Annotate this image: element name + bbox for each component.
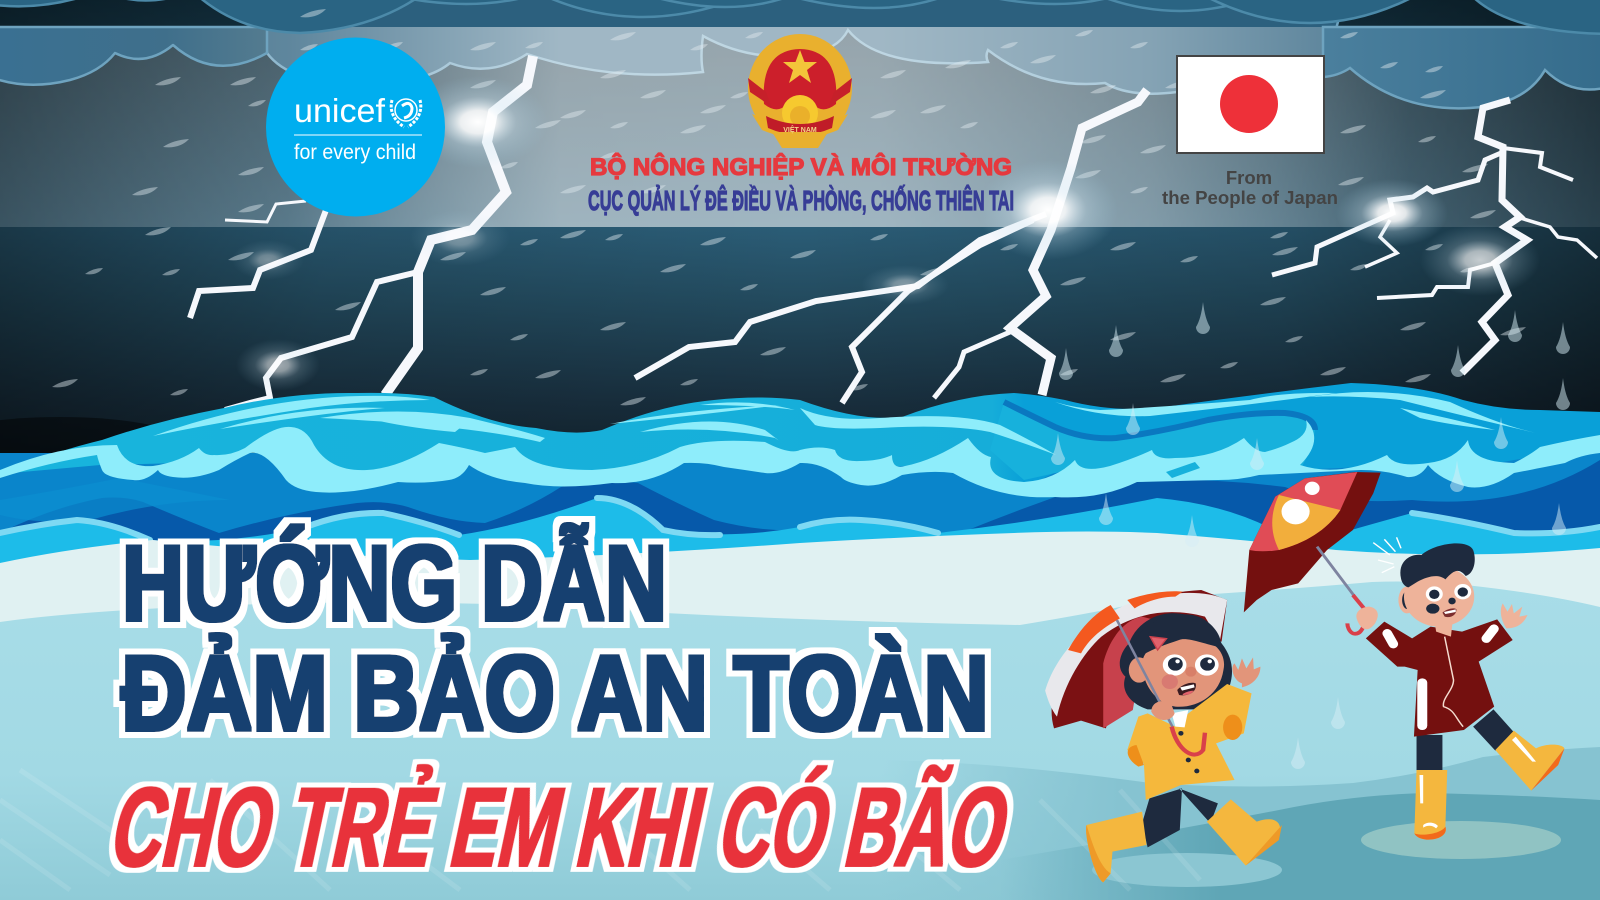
ministry name: BỘ NÔNG NGHIỆP VÀ MÔI TRƯỜNG <box>590 153 1012 181</box>
ministry name: CỤC QUẢN LÝ ĐÊ ĐIỀU VÀ PHÒNG, CHỐNG THIÊN TAI <box>588 184 1014 216</box>
wave curl <box>990 402 1315 480</box>
lightning glows <box>232 76 1540 391</box>
Japan caption <box>1162 167 1338 208</box>
Japan caption: the People of Japan <box>1162 187 1338 208</box>
lightning bolt: left <box>190 56 533 410</box>
storm cloud, upper left <box>0 27 267 85</box>
pale shoreline <box>0 532 1600 640</box>
icon: flag of Japan <box>1177 56 1324 153</box>
main wave body <box>0 383 1600 488</box>
logo: unicef <box>266 38 445 216</box>
Japan caption: From <box>1226 167 1272 188</box>
lightning bolts <box>190 56 1597 410</box>
bright lower wave <box>0 498 1600 580</box>
flood wave <box>0 383 1600 580</box>
storm clouds, top row <box>0 0 1600 34</box>
dark wave band <box>0 460 1600 560</box>
lightning bolt: centre <box>635 90 1147 403</box>
storm sky background <box>0 0 1600 480</box>
title: line 2: ĐẢM BẢO AN TOÀN <box>121 633 989 753</box>
vertical rain drops <box>1051 302 1570 769</box>
ministry name <box>588 153 1014 216</box>
lightning bolt: right <box>1272 100 1597 373</box>
deep water base <box>0 453 1600 573</box>
child: girl with umbrella <box>1045 590 1282 882</box>
logo: unicef: for every child <box>294 141 416 164</box>
foam <box>0 420 1600 497</box>
logo: unicef: unicef <box>294 92 386 129</box>
icon: Vietnam national emblem: VIỆT NAM <box>783 125 817 134</box>
title: line 3: CHO TRẺ EM KHI CÓ BÃO <box>102 764 1021 891</box>
slanted rain <box>52 9 1526 405</box>
translucent header band <box>0 27 1600 227</box>
flooded ground <box>0 582 1600 900</box>
storm clouds, back row <box>262 0 1345 94</box>
illustration: two children with umbrellas <box>1045 472 1564 882</box>
title: line 1: HƯỚNG DẪN <box>122 523 667 643</box>
child: boy with umbrella <box>1244 472 1564 840</box>
foam highlights <box>153 396 795 442</box>
wind streaks <box>0 770 1200 890</box>
icon: unicef emblem <box>391 99 421 127</box>
icon: Vietnam national emblem <box>748 34 852 148</box>
storm cloud, upper right <box>1323 27 1600 108</box>
